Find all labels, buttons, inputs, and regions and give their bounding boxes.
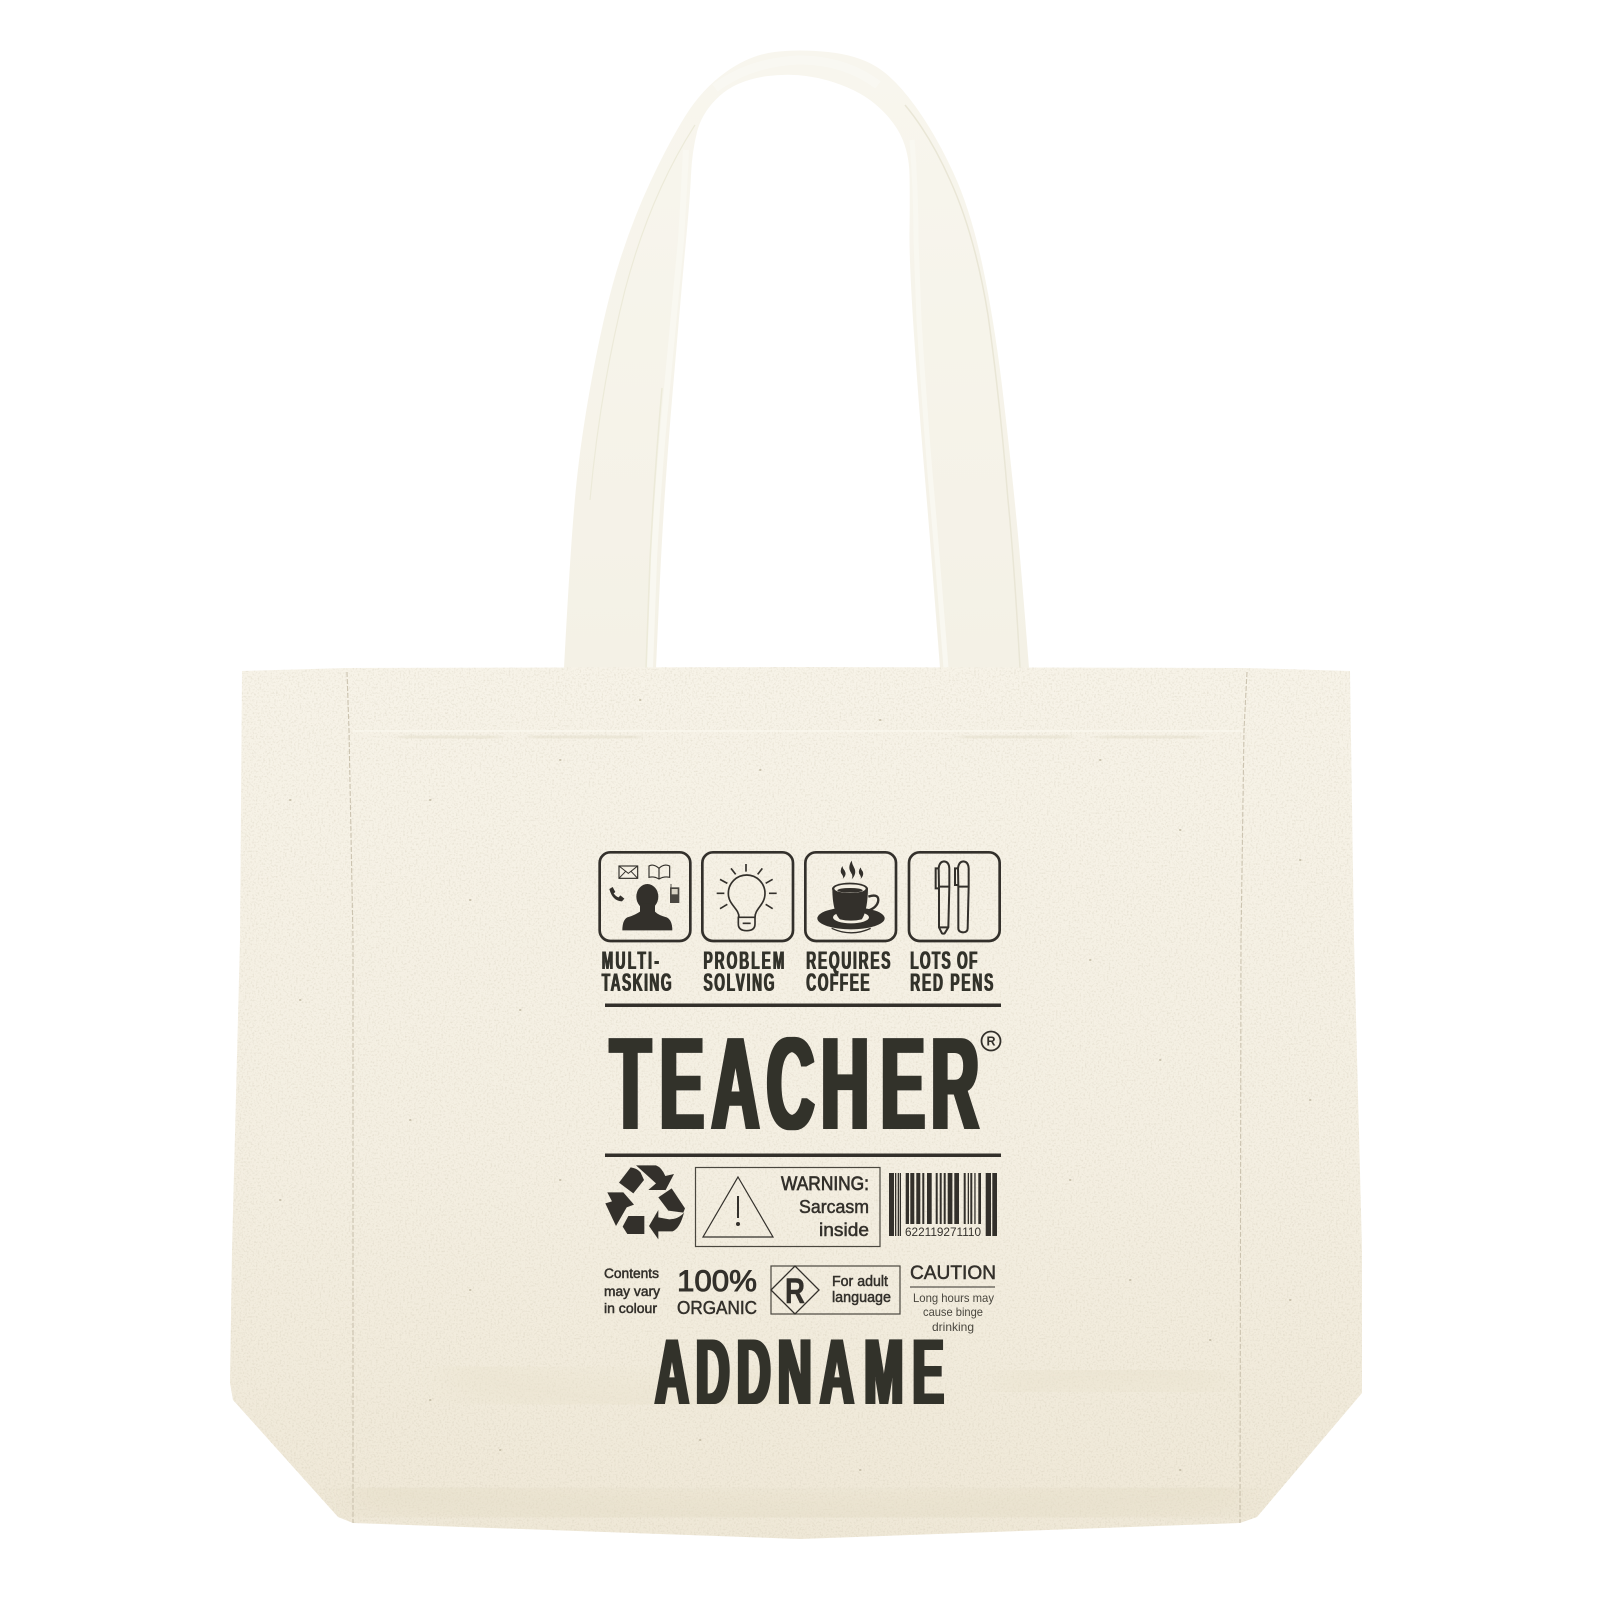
label: requires coffee: REQUIRES xyxy=(806,948,890,975)
icon labels xyxy=(602,948,993,997)
caution note xyxy=(910,1262,996,1334)
warning label: WARNING: xyxy=(781,1174,869,1195)
registered mark: R xyxy=(986,1034,996,1048)
note: contents may vary: Contents xyxy=(604,1266,659,1281)
label: lots of red pens: LOTS OF xyxy=(910,948,977,975)
label: problem solving xyxy=(703,948,784,997)
warning triangle xyxy=(703,1177,773,1237)
caution note: cause binge xyxy=(923,1305,983,1319)
note: contents may vary xyxy=(604,1266,660,1316)
bottom divider xyxy=(605,1154,1001,1157)
warning label xyxy=(696,1168,880,1246)
note: contents may vary: in colour xyxy=(604,1301,658,1316)
badge: 100% organic: ORGANIC xyxy=(677,1298,757,1318)
badge: 100% organic: 100% xyxy=(677,1265,757,1298)
icon: recycling xyxy=(605,1165,685,1239)
label: multi-tasking: TASKING xyxy=(602,970,672,997)
bag handle xyxy=(564,50,1029,668)
label: lots of red pens xyxy=(910,948,993,997)
badge: 100% organic xyxy=(677,1265,757,1318)
barcode: 622119271110 xyxy=(905,1225,981,1239)
warning label: Sarcasm xyxy=(799,1196,869,1217)
caution note: drinking xyxy=(932,1320,974,1334)
rating label: R for adult language: language xyxy=(832,1290,891,1306)
label: lots of red pens: RED PENS xyxy=(910,970,993,997)
label: problem solving: SOLVING xyxy=(703,970,774,997)
label: problem solving: PROBLEM xyxy=(703,948,784,975)
icon: pens xyxy=(909,852,1000,941)
label: multi-tasking: MULTI- xyxy=(602,948,659,975)
rating label: R for adult language: For adult xyxy=(832,1274,888,1290)
tote bag illustration xyxy=(225,50,1370,1545)
fabric texture and folds xyxy=(225,660,1370,1545)
top divider xyxy=(605,1004,1001,1007)
barcode xyxy=(889,1173,997,1239)
label: requires coffee: COFFEE xyxy=(806,970,870,997)
rating label: R for adult language: R xyxy=(785,1272,805,1311)
registered mark xyxy=(982,1032,1000,1050)
icon row xyxy=(600,852,1000,941)
icon: light bulb xyxy=(702,852,793,941)
icon: multi-tasking xyxy=(600,852,690,941)
caution note: CAUTION xyxy=(910,1262,996,1284)
note: contents may vary: may vary xyxy=(604,1284,660,1299)
caution note: Long hours may xyxy=(913,1291,994,1305)
bag body xyxy=(230,667,1362,1539)
name: ADDNAME: ADDNAME xyxy=(655,1319,944,1424)
rating label: R for adult language xyxy=(771,1266,900,1314)
label: multi-tasking xyxy=(602,948,672,997)
title: TEACHER: TEACHER xyxy=(610,1011,979,1158)
label: requires coffee xyxy=(806,948,890,997)
icon: coffee cup xyxy=(805,852,896,941)
warning label: inside xyxy=(819,1219,869,1240)
